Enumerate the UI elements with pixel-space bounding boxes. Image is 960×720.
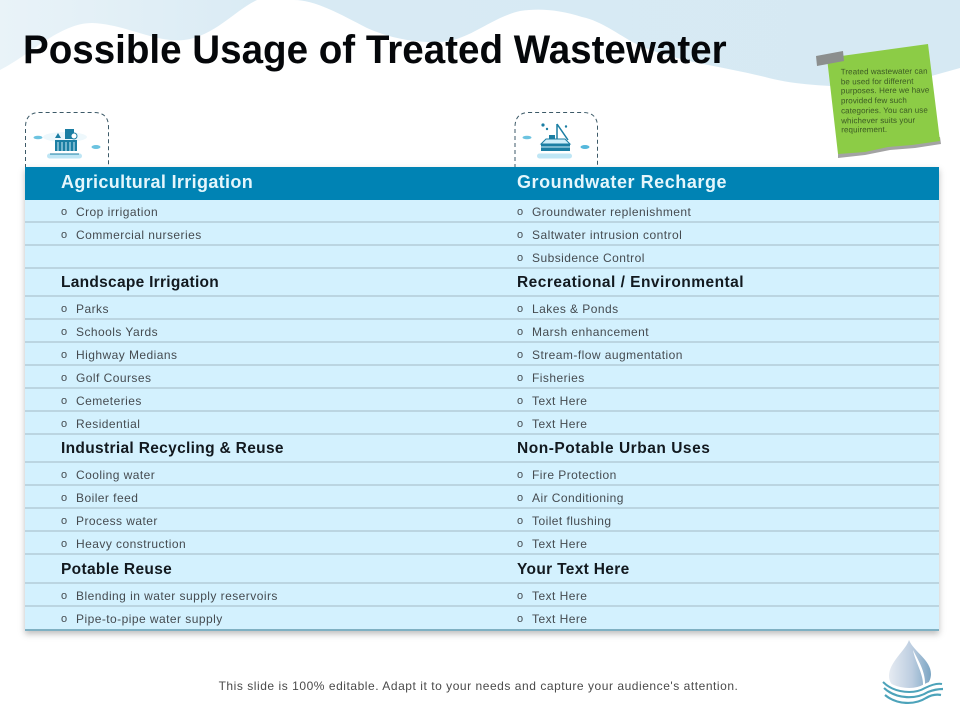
row: schools yards: o [517,326,523,338]
row: residential: o [61,418,67,430]
row: crop irrigation: Groundwater replenishment [532,205,691,219]
row: blending: Text Here [532,589,587,603]
sticky note text: requirement. [841,125,887,135]
row: cemeteries: o [61,395,67,407]
subheading: potable reuse, your text: Potable Reuse [61,561,172,578]
row: schools yards: Schools Yards [76,325,158,339]
table header row: Agricultural Irrigation [61,172,253,192]
row: residential: Residential [76,417,140,431]
row: blending [25,584,939,607]
row: heavy construction: o [517,538,523,550]
row: cooling water: o [61,469,67,481]
row: schools yards [25,320,939,343]
row: cemeteries: Text Here [532,394,587,408]
row: highway medians: Stream-flow augmentation [532,348,683,362]
row: crop irrigation [25,200,939,223]
background: hills band [0,0,960,86]
subheading: industrial, non-potable [25,435,939,463]
row: subsidence control: Subsidence Control [532,251,645,265]
sticky note text: whichever suits your [841,115,915,125]
title: Possible Usage of Treated Wastewater [23,28,727,72]
logo: water drop and waves [882,640,943,704]
row: boiler feed [25,486,939,509]
row: highway medians: o [61,349,67,361]
row: pipe-to-pipe: o [517,613,523,625]
row: parks [25,297,939,320]
row: highway medians: Highway Medians [76,348,177,362]
row: highway medians [25,343,939,366]
row: heavy construction: Heavy construction [76,537,186,551]
table [25,167,939,631]
sticky note [816,44,941,158]
row: golf courses: Golf Courses [76,371,151,385]
row: heavy construction [25,532,939,555]
subheading: landscape, recreational [25,269,939,297]
row: crop irrigation: Crop irrigation [76,205,158,219]
row: golf courses: o [517,372,523,384]
row: commercial nurseries [25,223,939,246]
row: commercial nurseries: o [517,229,523,241]
row: parks: Lakes & Ponds [532,302,619,316]
row: schools yards: o [61,326,67,338]
row: parks: o [61,303,67,315]
row: commercial nurseries: o [61,229,67,241]
row: highway medians: o [517,349,523,361]
table header row [25,167,939,200]
row: cemeteries: Cemeteries [76,394,142,408]
row: process water: Toilet flushing [532,514,611,528]
row: cooling water: Cooling water [76,468,155,482]
row: cemeteries: o [517,395,523,407]
row: golf courses: Fisheries [532,371,585,385]
row: golf courses: o [61,372,67,384]
row: pipe-to-pipe: Text Here [532,612,587,626]
row: residential [25,412,939,435]
row: schools yards: Marsh enhancement [532,325,649,339]
row: heavy construction: Text Here [532,537,587,551]
row: heavy construction: o [61,538,67,550]
subheading: industrial, non-potable: Non-Potable Urban Uses [517,440,710,457]
row: residential: Text Here [532,417,587,431]
row: process water: o [517,515,523,527]
row: commercial nurseries: Commercial nurseries [76,228,202,242]
row: commercial nurseries: Saltwater intrusion control [532,228,682,242]
row: parks: Parks [76,302,109,316]
row: boiler feed: Air Conditioning [532,491,624,505]
row: pipe-to-pipe: o [61,613,67,625]
sticky note text [840,67,929,135]
row: process water: o [61,515,67,527]
table header row: Groundwater Recharge [517,172,727,192]
sticky note text: purposes. Here we have [841,86,929,96]
subheading: potable reuse, your text: Your Text Here [517,561,630,578]
row: subsidence control [25,246,939,269]
row: blending: o [61,590,67,602]
row: blending: o [517,590,523,602]
subheading: potable reuse, your text [25,555,939,584]
row: crop irrigation: o [517,206,523,218]
row: boiler feed: o [61,492,67,504]
row: subsidence control: o [517,252,523,264]
sticky note text: Treated wastewater can [841,67,928,76]
row: golf courses [25,366,939,389]
row: boiler feed: Boiler feed [76,491,138,505]
icon: agricultural irrigation [25,112,109,167]
subheading: landscape, recreational: Landscape Irrigation [61,274,219,291]
row: cooling water: Fire Protection [532,468,617,482]
row: pipe-to-pipe: Pipe-to-pipe water supply [76,612,223,626]
icon: groundwater recharge [514,112,598,167]
row: residential: o [517,418,523,430]
row: cooling water: o [517,469,523,481]
sticky note text: provided few such [841,96,907,106]
row: boiler feed: o [517,492,523,504]
row: crop irrigation: o [61,206,67,218]
subheading: industrial, non-potable: Industrial Recycling & Reuse [61,440,284,457]
row: cemeteries [25,389,939,412]
row: process water: Process water [76,514,158,528]
footer note: This slide is 100% editable. Adapt it to your needs and capture your audience's attention. [219,679,738,693]
sticky note text: be used for different [841,76,914,86]
row: pipe-to-pipe [61,612,587,626]
row: process water [25,509,939,532]
sticky note text: categories. You can use [841,105,928,115]
row: cooling water [25,463,939,486]
subheading: landscape, recreational: Recreational / Environmental [517,274,744,291]
row: blending: Blending in water supply reservoirs [76,589,278,603]
row: parks: o [517,303,523,315]
